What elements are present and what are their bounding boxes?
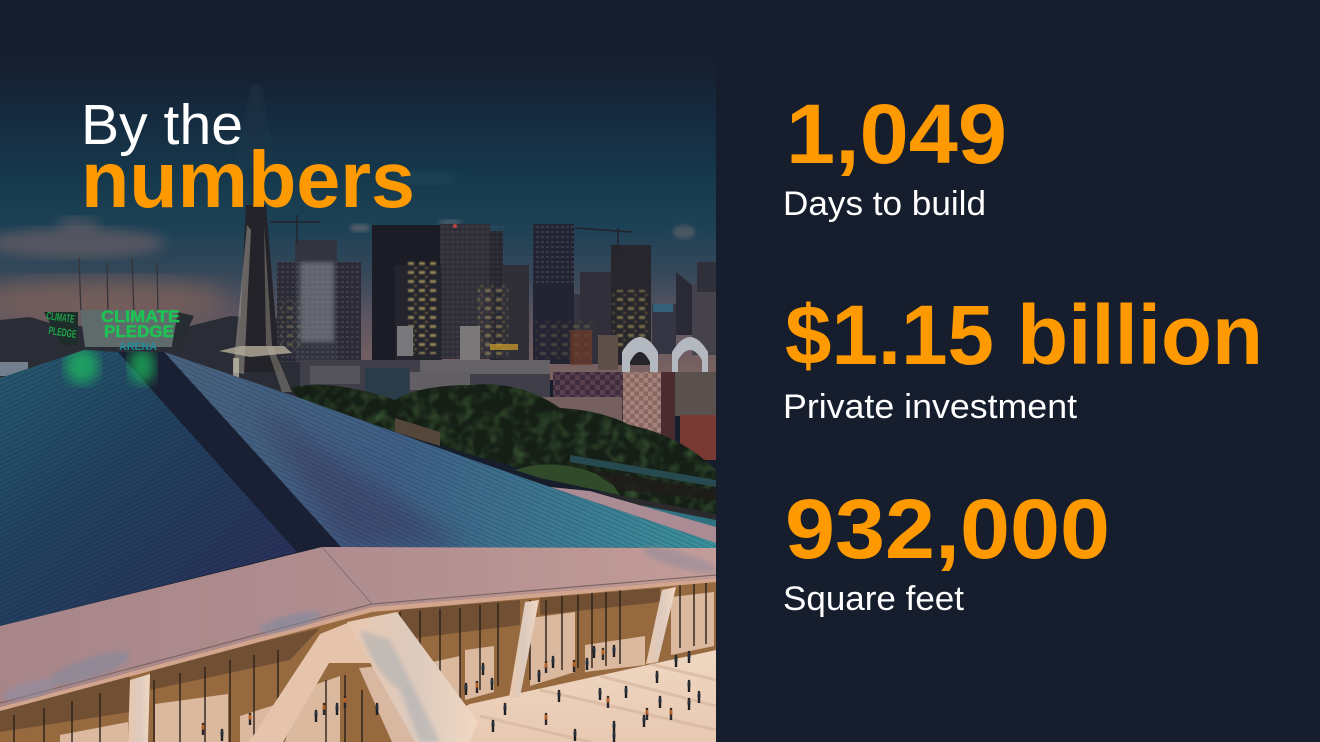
stat: days to build: [783, 87, 1007, 223]
pale interior panels: [60, 592, 714, 742]
Climate Pledge Arena sign: PLEDGE: [104, 322, 174, 341]
heading: numbers: [81, 135, 415, 224]
stat: private investment: $1.15 billion: [785, 288, 1263, 382]
stat: days to build: 1,049: [786, 87, 1007, 181]
stat: square feet: Square feet: [783, 580, 965, 618]
roof left panel: [0, 350, 297, 626]
facade columns: [128, 587, 676, 742]
roof edge strip: [596, 490, 716, 520]
crane left: [270, 215, 320, 243]
arena facade glass: [0, 578, 716, 742]
distant low city left: [0, 316, 300, 400]
heading: By the: [81, 93, 243, 157]
Climate Pledge Arena sign: CLIMATE: [46, 310, 75, 326]
plaza floor: [466, 650, 716, 742]
skyline: [0, 215, 716, 400]
heading: [81, 93, 415, 224]
Climate Pledge Arena sign: ARENA: [119, 341, 157, 353]
dark upper glazing: [0, 588, 660, 732]
trees: [290, 384, 716, 520]
people on plaza: [202, 645, 700, 742]
green roof glow: [65, 348, 155, 384]
stat: square feet: 932,000: [785, 482, 1110, 576]
Climate Pledge Arena sign: PLEDGE: [48, 325, 77, 341]
stat: private investment: [783, 288, 1263, 426]
Climate Pledge Arena sign: [46, 310, 180, 350]
roof right panel: [164, 352, 716, 548]
Space Needle: [219, 85, 292, 392]
arches and checkered buildings: [530, 337, 716, 460]
canopy roof band: [0, 542, 719, 711]
sky: [0, 86, 716, 380]
roof ridge seam: [118, 352, 341, 552]
Climate Pledge tower poles and sign frame: [44, 258, 194, 350]
Climate Pledge Arena sign: CLIMATE: [101, 307, 180, 326]
lit windows: [280, 224, 650, 360]
stat: square feet: [783, 482, 1110, 618]
clouds: [0, 215, 696, 326]
photo: arena and skyline at dusk: [0, 83, 716, 742]
arena roof: [0, 348, 716, 626]
low buildings: [300, 360, 550, 400]
stat: private investment: Private investment: [783, 388, 1078, 426]
far towers: [277, 262, 361, 362]
stat: days to build: Days to build: [783, 185, 986, 223]
